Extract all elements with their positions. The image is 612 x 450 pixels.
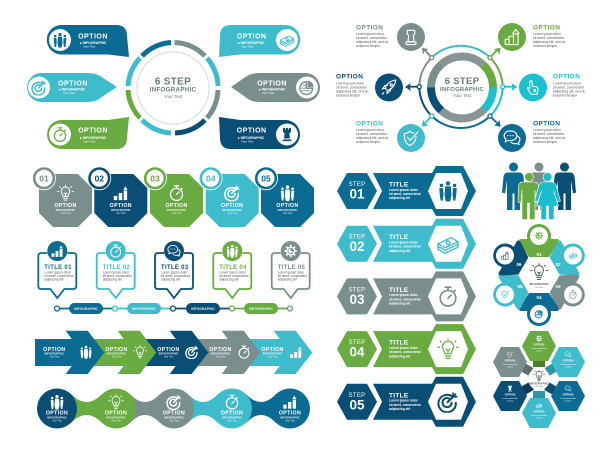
panel: 6 step radial infographic (336, 23, 586, 152)
petal 01: 01 (536, 252, 542, 257)
pin 05: Lorem ipsum dolor (278, 270, 305, 274)
pin 01: sit amet, consectetur (44, 274, 75, 278)
flower centre: INFOGRAPHIC (529, 282, 549, 286)
centre title: 6 STEP (445, 76, 480, 87)
step 03: TITLE (389, 287, 409, 294)
octagon 01 (32, 167, 92, 227)
pin 04: adipiscing elit (219, 278, 239, 282)
step 01: Lorem ipsum dolor (389, 188, 419, 192)
circle 1: Your Text (52, 420, 62, 422)
arrow 1: OPTION (43, 347, 65, 353)
option: rook: adipiscing elit, sed do (356, 40, 389, 44)
hexagon: green: OPTION (534, 342, 544, 346)
octagon 03: OPTION (165, 203, 188, 209)
pin 05: sit amet, consectetur (278, 274, 308, 278)
pin 01: adipiscing elit (44, 278, 64, 282)
octagon 05: Your Text (283, 212, 293, 215)
option: rook: eiusmod tempor (356, 44, 381, 48)
centre title: Your Text (164, 94, 183, 99)
panel: hexagon puzzle (493, 331, 585, 428)
bubble: people: ▸ INFOGRAPHIC (79, 41, 107, 45)
pin 02: Lorem ipsum dolor (103, 270, 130, 274)
step 02: sit amet, consectetur (389, 245, 422, 249)
flower centre (529, 264, 549, 289)
circle 3: OPTION (163, 410, 185, 416)
step 05: Lorem ipsum dolor (389, 399, 419, 403)
octagon 04 (199, 167, 259, 227)
option: shield: adipiscing elit, sed do (356, 136, 389, 140)
step 02: STEP (349, 235, 365, 241)
option: rook: sit amet, consectetur (356, 36, 388, 40)
panel: connected circles (37, 388, 310, 428)
bubble: money: Your Text (241, 44, 254, 48)
step 02 (337, 219, 476, 269)
bubble: money (219, 25, 300, 57)
hexagon: navy (493, 381, 527, 411)
step 04: 04 (349, 345, 365, 360)
hexagon: light teal lower: OPTION (534, 410, 544, 414)
step 03: sit amet, consectetur (389, 297, 422, 301)
bubble: chess rook: ▸ INFOGRAPHIC (237, 136, 265, 140)
petal 03: 03 (555, 284, 561, 289)
pin 04: sit amet, consectetur (219, 274, 250, 278)
panel: title pins (38, 241, 310, 298)
panel: arrow chain (35, 331, 312, 374)
octagon 03: INFOGRAPHIC (167, 208, 186, 212)
arrow 3: Your Text (164, 356, 174, 358)
arrow 2: Your Text (112, 356, 122, 358)
option: chat: adipiscing elit, sed do (533, 136, 566, 140)
bubble: people: Your Text (83, 44, 96, 48)
step 01: STEP (349, 182, 365, 188)
arrow 2 (82, 331, 156, 374)
option: chat (498, 120, 566, 152)
option: rocket (336, 74, 403, 102)
pin 02: TITLE 02 (103, 265, 130, 271)
step 04: Lorem ipsum dolor (389, 346, 419, 350)
option: growth bars: eiusmod tempor (533, 44, 558, 48)
hexagon: light teal upper: Lorem ipsum dolor (560, 363, 576, 366)
circle 4: OPTION (221, 410, 243, 416)
bubble: people (47, 25, 129, 57)
option: growth bars: Lorem ipsum dolor (533, 32, 562, 36)
pin 03: sit amet, consectetur (161, 274, 191, 278)
circle 1: OPTION (46, 410, 68, 416)
octagon 01: Your Text (61, 212, 71, 215)
hexagon: grey: OPTION (505, 358, 515, 362)
arrow 4: OPTION (209, 347, 232, 353)
bubble: people: OPTION (78, 33, 108, 40)
petal 05: 05 (517, 284, 523, 289)
pin 03 (155, 241, 193, 298)
octagon 04: Your Text (227, 212, 237, 215)
option: rook: Lorem ipsum dolor (356, 32, 385, 36)
circle 4: Your Text (227, 420, 237, 422)
option: chat: OPTION (533, 120, 560, 127)
hexagon: light teal upper: OPTION (563, 358, 573, 362)
octagon 02: 02 (95, 173, 104, 183)
teal woman (534, 173, 560, 220)
octagon 02: Your Text (116, 212, 126, 215)
option: shield: OPTION (356, 120, 383, 127)
circle 2: OPTION (105, 410, 127, 416)
bubble: pie chart (231, 73, 320, 102)
octagon 05: OPTION (276, 203, 299, 209)
step 05: STEP (349, 393, 365, 399)
hexagon: light teal lower: Lorem ipsum dolor (531, 414, 547, 417)
circle 2: Your Text (111, 420, 121, 422)
step 02: adipiscing elit (389, 249, 411, 253)
circle 3: Your Text (169, 420, 179, 422)
option: rocket: sit amet, consectetur (336, 86, 368, 90)
option: chat: sit amet, consectetur (533, 132, 565, 136)
circle 1 (37, 388, 77, 428)
segmented ring (128, 42, 218, 133)
bubble: pie chart: ▸ INFOGRAPHIC (258, 88, 286, 92)
circle 5: OPTION (279, 410, 301, 416)
petal 04: 04 (536, 295, 542, 300)
bubble: target: ▸ INFOGRAPHIC (58, 88, 86, 92)
option: rook (356, 23, 425, 51)
petal 06: 06 (516, 262, 522, 267)
octagon 03: 03 (150, 173, 160, 183)
arrow 3 (134, 331, 208, 374)
hexagon: dark teal: OPTION (563, 392, 573, 396)
arrow 4: INFOGRAPHIC (211, 352, 230, 356)
option: hand (519, 74, 586, 102)
option: shield (356, 120, 425, 152)
octagon 04: OPTION (221, 203, 243, 209)
octagon 02 (88, 167, 147, 227)
pin 04 (213, 241, 251, 298)
hexagon: grey: Lorem ipsum dolor (502, 363, 518, 366)
step 02: TITLE (389, 234, 409, 241)
circle 5: Your Text (285, 420, 295, 422)
step 04 (337, 324, 476, 374)
hexagon: navy: sit amet (507, 400, 514, 402)
centre title: 6 STEP (155, 76, 191, 88)
option: growth bars: OPTION (533, 24, 560, 31)
option: hand: sit amet, consectetur (553, 86, 585, 90)
arrow 5: Your Text (268, 356, 278, 358)
hexagon: green (522, 331, 556, 361)
bubble: target (27, 73, 117, 102)
step 02: 02 (349, 239, 365, 254)
hexagon: grey (493, 347, 527, 377)
centre title (440, 76, 484, 98)
panel: numbered octagons (32, 167, 314, 227)
pin 02: adipiscing elit (103, 278, 122, 282)
step 03: 03 (349, 292, 365, 307)
hexagon: green: Lorem ipsum dolor (531, 347, 547, 350)
arrow 1: INFOGRAPHIC (45, 352, 64, 356)
option: hand: eiusmod tempor (553, 94, 578, 98)
timeline: INFOGRAPHIC (132, 307, 156, 311)
timeline (54, 303, 292, 314)
pin 01: Lorem ipsum dolor (44, 270, 72, 274)
arrow 5: OPTION (261, 347, 284, 353)
pin 05 (272, 241, 310, 298)
octagon 05 (254, 167, 314, 227)
pin 03: adipiscing elit (161, 278, 180, 282)
octagon 01: 01 (39, 173, 49, 183)
step 04: TITLE (389, 340, 409, 347)
step 01 (337, 166, 476, 216)
step 03 (337, 271, 476, 321)
octagon 03: Your Text (172, 212, 182, 215)
circle 2: INFOGRAPHIC (106, 416, 126, 420)
pin 04: Lorem ipsum dolor (219, 270, 247, 274)
bubble: stopwatch: OPTION (78, 128, 108, 135)
circle 3 (154, 388, 194, 428)
option: chat: Lorem ipsum dolor (533, 128, 562, 132)
pin 05: adipiscing elit (278, 278, 297, 282)
circle 5 (270, 388, 310, 428)
bubble: money: OPTION (237, 33, 267, 40)
centre disc (137, 52, 209, 124)
hexagon: navy: Lorem ipsum dolor (502, 397, 518, 400)
option: shield: sit amet, consectetur (356, 132, 388, 136)
arrow 5: INFOGRAPHIC (263, 352, 282, 356)
timeline: INFOGRAPHIC (191, 307, 215, 311)
grey man (528, 162, 550, 210)
thick inner ring (431, 57, 493, 118)
pin 02 (97, 241, 135, 298)
hexagon: navy: OPTION (505, 392, 515, 396)
bubble: stopwatch: Your Text (83, 139, 96, 143)
hexagon: grey: sit amet (507, 366, 514, 368)
option: rocket: OPTION (336, 74, 363, 81)
option: rocket: adipiscing elit, sed do (336, 90, 369, 94)
step 01: TITLE (389, 182, 409, 188)
circle connectors (71, 394, 276, 423)
pin 01: TITLE 01 (44, 265, 72, 271)
step 03: Lorem ipsum dolor (389, 293, 419, 297)
arrow 2: OPTION (105, 347, 128, 353)
octagon 04: INFOGRAPHIC (222, 208, 242, 212)
blue man (502, 162, 525, 210)
option: hand: adipiscing elit, sed do (553, 90, 586, 94)
pin 03: Lorem ipsum dolor (161, 270, 188, 274)
bubble: pie chart: OPTION (257, 80, 287, 87)
ring nodes (417, 56, 505, 118)
pin 02: sit amet, consectetur (103, 274, 133, 278)
option: growth bars: sit amet, consectetur (533, 36, 565, 40)
panel: hexagon steps (337, 166, 476, 427)
hexagon: light teal lower (522, 398, 556, 428)
centre title: INFOGRAPHIC (150, 86, 197, 94)
puzzle centre (528, 368, 550, 390)
petal 02: 02 (555, 262, 561, 267)
pin 05: TITLE 05 (278, 265, 305, 271)
bubble: money: ▸ INFOGRAPHIC (237, 41, 265, 45)
arrow 4 (186, 331, 260, 374)
pin 04: TITLE 04 (219, 265, 247, 271)
step 01: adipiscing elit (389, 196, 411, 200)
octagon 03 (144, 167, 203, 227)
circle 3: INFOGRAPHIC (164, 416, 184, 420)
option: rook: OPTION (356, 24, 383, 31)
option: growth bars: adipiscing elit, sed do (533, 40, 566, 44)
circle 2 (96, 388, 136, 428)
hexagon: green: sit amet (536, 350, 543, 352)
hexagon: dark teal: Lorem ipsum dolor (560, 397, 576, 400)
pin 03: TITLE 03 (161, 265, 189, 271)
circle 5: INFOGRAPHIC (280, 416, 300, 420)
arrow 2: INFOGRAPHIC (107, 352, 126, 356)
hexagon: light teal upper (551, 347, 585, 377)
option: hand: OPTION (553, 74, 580, 81)
step 02: Lorem ipsum dolor (389, 241, 419, 245)
puzzle connectors (520, 358, 558, 400)
green man (518, 173, 539, 220)
flower centre: Your Text (535, 286, 543, 289)
step 05: adipiscing elit (389, 407, 411, 411)
step 04: sit amet, consectetur (389, 350, 422, 354)
arrow 1: Your Text (49, 356, 60, 358)
step 04: STEP (349, 340, 365, 346)
arrow 5 (243, 331, 312, 374)
octagon 02: INFOGRAPHIC (111, 208, 131, 212)
bubble: pie chart: Your Text (262, 91, 275, 95)
centre title (150, 76, 197, 99)
octagon 05: INFOGRAPHIC (278, 208, 297, 212)
puzzle centre: Your Text (535, 385, 543, 388)
timeline: INFOGRAPHIC (249, 307, 273, 311)
hexagon: dark teal (551, 381, 585, 411)
step 05: 05 (349, 397, 365, 412)
bubble: stopwatch (47, 117, 129, 149)
option: growth bars (498, 23, 566, 51)
option: chat: eiusmod tempor (533, 140, 558, 144)
step 01: sit amet, consectetur (389, 192, 422, 196)
centre title: Your Text (453, 93, 472, 98)
bubble: chess rook: Your Text (241, 139, 254, 143)
hexagon: light teal upper: sit amet (565, 366, 572, 368)
arrow 3: OPTION (157, 347, 180, 353)
bubble: target: Your Text (63, 91, 76, 95)
arrow 1 (35, 331, 104, 374)
octagon 05: 05 (261, 173, 271, 183)
step 03: STEP (349, 287, 365, 293)
arrows from ring to circles (405, 45, 517, 130)
timeline: INFOGRAPHIC (74, 307, 98, 311)
octagon 01: OPTION (54, 203, 77, 209)
centre title: INFOGRAPHIC (440, 87, 484, 93)
arrow 4: Your Text (216, 356, 226, 358)
option: shield: eiusmod tempor (356, 140, 381, 144)
thin outer ring (419, 46, 503, 128)
panel: 6 part radial flower (485, 224, 593, 326)
option: rocket: Lorem ipsum dolor (336, 82, 365, 86)
step 05: TITLE (389, 392, 409, 399)
hexagon: light teal lower: sit amet (536, 416, 543, 420)
option: rocket: eiusmod tempor (336, 94, 361, 98)
octagon 04: 04 (206, 173, 216, 183)
step 05: sit amet, consectetur (389, 403, 422, 407)
puzzle centre: INFOGRAPHIC (529, 382, 549, 386)
step 05 (337, 377, 476, 427)
pin 01 (38, 241, 76, 298)
bubble: chess rook (219, 117, 300, 149)
circle 4 (212, 388, 252, 428)
panel: group of people (502, 162, 576, 220)
navy man (553, 162, 576, 210)
arrow 3: INFOGRAPHIC (159, 352, 178, 356)
bubble: chess rook: OPTION (237, 128, 267, 135)
circle 4: INFOGRAPHIC (222, 416, 242, 420)
option: shield: Lorem ipsum dolor (356, 128, 385, 132)
bubble: target: OPTION (58, 80, 88, 87)
panel: 6 step speech bubble infographic (27, 25, 320, 149)
octagon 02: OPTION (110, 203, 132, 209)
step 04: adipiscing elit (389, 354, 411, 358)
step 03: adipiscing elit (389, 302, 411, 306)
step 01: 01 (349, 186, 365, 202)
circle 1: INFOGRAPHIC (47, 416, 67, 420)
option: hand: Lorem ipsum dolor (553, 82, 582, 86)
octagon 01: INFOGRAPHIC (56, 208, 75, 212)
hexagon: dark teal: sit amet (565, 400, 572, 402)
bubble: stopwatch: ▸ INFOGRAPHIC (79, 136, 107, 140)
